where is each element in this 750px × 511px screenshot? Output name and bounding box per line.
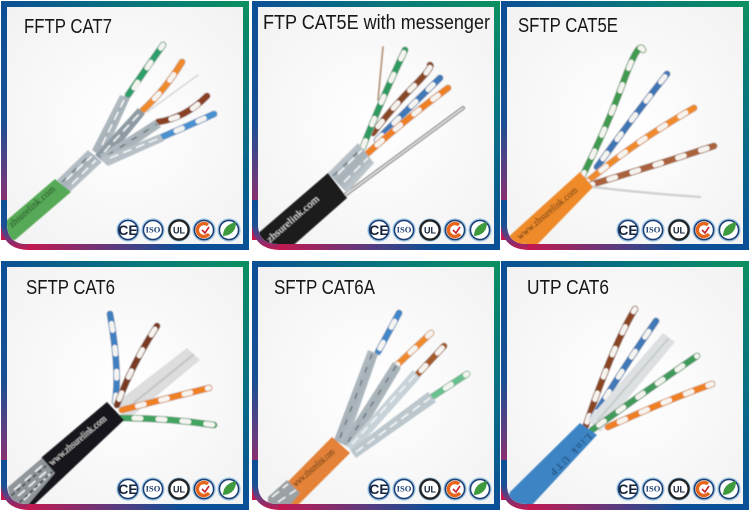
badge: quality mark: [693, 478, 715, 500]
certification badges: [368, 219, 491, 241]
badge: CE: CE: [618, 222, 638, 238]
certification badges: [117, 478, 240, 500]
badge: RoHS leaf: [469, 219, 491, 241]
panel: FTP CAT5E with messenger: [252, 1, 500, 250]
badge: UL: UL: [173, 226, 185, 236]
cable illustration: [505, 309, 712, 505]
panel: SFTP CAT5E: [501, 1, 749, 250]
badge: quality mark: [193, 478, 215, 500]
badge: UL: UL: [173, 484, 185, 494]
jacket print: www.zhsurelink.com: [291, 447, 337, 489]
badge: CE: CE: [618, 481, 638, 497]
badge: CE: CE: [369, 481, 389, 497]
badge: ISO: ISO: [397, 484, 412, 494]
badge: ISO: ISO: [397, 224, 412, 234]
heading: FTP CAT5E with messenger: [263, 12, 490, 34]
badge: UL: UL: [673, 226, 685, 236]
heading: UTP CAT6: [527, 277, 609, 299]
badge: RoHS leaf: [718, 478, 740, 500]
badge: UL: UL: [424, 226, 436, 236]
certification badges: [617, 219, 740, 241]
heading: FFTP CAT7: [24, 16, 112, 38]
badge: ISO: ISO: [146, 484, 161, 494]
badge: ISO: ISO: [146, 224, 161, 234]
heading: SFTP CAT6: [26, 277, 115, 299]
badge: RoHS leaf: [218, 478, 240, 500]
jacket print: zhsurelink.com: [7, 184, 58, 230]
badge: RoHS leaf: [218, 219, 240, 241]
panel frame: [1, 261, 249, 510]
panel frame: [1, 1, 249, 250]
cable illustration: [0, 45, 214, 240]
badge: quality mark: [193, 219, 215, 241]
badge: quality mark: [693, 219, 715, 241]
panel: SFTP CAT6: [1, 261, 249, 510]
badge: RoHS leaf: [469, 478, 491, 500]
badge: ISO: ISO: [646, 224, 661, 234]
cable illustration: [265, 313, 467, 505]
badge: quality mark: [444, 219, 466, 241]
badge: quality mark: [444, 478, 466, 500]
panel frame: [252, 1, 500, 250]
badge: UL: UL: [673, 484, 685, 494]
panel frame: [252, 261, 500, 510]
panel frame: [501, 1, 749, 250]
panel: SFTP CAT6A: [252, 261, 500, 510]
heading: SFTP CAT6A: [274, 277, 376, 299]
badge: CE: CE: [118, 222, 138, 238]
cable illustration: [505, 48, 714, 250]
certification badges: [117, 219, 240, 241]
badge: ISO: ISO: [646, 484, 661, 494]
jacket print: zhsurelink.com: [265, 194, 322, 245]
certification badges: [617, 478, 740, 500]
panel: FFTP CAT7: [0, 1, 249, 250]
heading: SFTP CAT5E: [518, 15, 618, 37]
badge: RoHS leaf: [718, 219, 740, 241]
panel: UTP CAT6: [501, 261, 749, 510]
panel frame: [501, 261, 749, 510]
badge: UL: UL: [424, 484, 436, 494]
jacket print: www.zhsurelink.com: [47, 413, 109, 468]
jacket print: Link UTP: [546, 431, 594, 478]
jacket print: www.zhsurelink.com: [515, 185, 580, 242]
cable illustration: [255, 47, 463, 250]
cable illustration: [8, 314, 214, 505]
certification badges: [368, 478, 491, 500]
badge: CE: CE: [118, 481, 138, 497]
badge: CE: CE: [369, 222, 389, 238]
